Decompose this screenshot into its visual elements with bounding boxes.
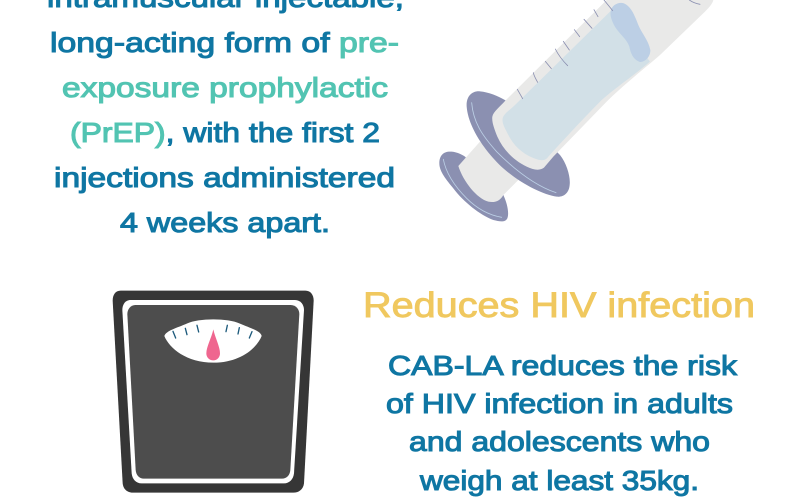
text block: CAB-LA risk reduction [386, 350, 738, 496]
text block: PrEP description: exposure prophylactic [62, 72, 388, 103]
dial needle [206, 329, 220, 360]
scale platform [127, 305, 299, 479]
syringe plunger [458, 142, 518, 202]
icon: syringe [439, 0, 713, 221]
text block: PrEP description: (PrEP) , with the first 2 [70, 117, 380, 148]
syringe liquid [502, 10, 650, 160]
syringe plunger end flange [439, 152, 508, 221]
text block: CAB-LA risk reduction: weigh at least 35kg. [419, 465, 699, 496]
flange highlights [443, 103, 556, 217]
scale dial [164, 319, 262, 363]
syringe plunger highlight [611, 3, 650, 62]
scale white frame [122, 300, 304, 483]
icon: weighing scale [113, 291, 314, 493]
scale outer body [113, 291, 314, 493]
text block: CAB-LA risk reduction: and adolescents who [409, 426, 710, 457]
text block: PrEP description: 4 weeks apart. [120, 207, 330, 238]
text block: PrEP description: long-acting form of pre- [50, 27, 399, 58]
text block: CAB-LA risk reduction: CAB-LA reduces the risk [388, 350, 738, 381]
syringe measurement ticks [517, 0, 700, 99]
text block: CAB-LA risk reduction: of HIV infection in adults [386, 388, 733, 419]
syringe barrel [492, 0, 713, 170]
text block: PrEP description: injections administered [54, 162, 395, 193]
text block: PrEP description [47, 0, 404, 238]
syringe barrel flange [467, 91, 570, 197]
dial ticks [173, 325, 252, 338]
heading: Reduces HIV infection: Reduces HIV infection [363, 286, 755, 325]
